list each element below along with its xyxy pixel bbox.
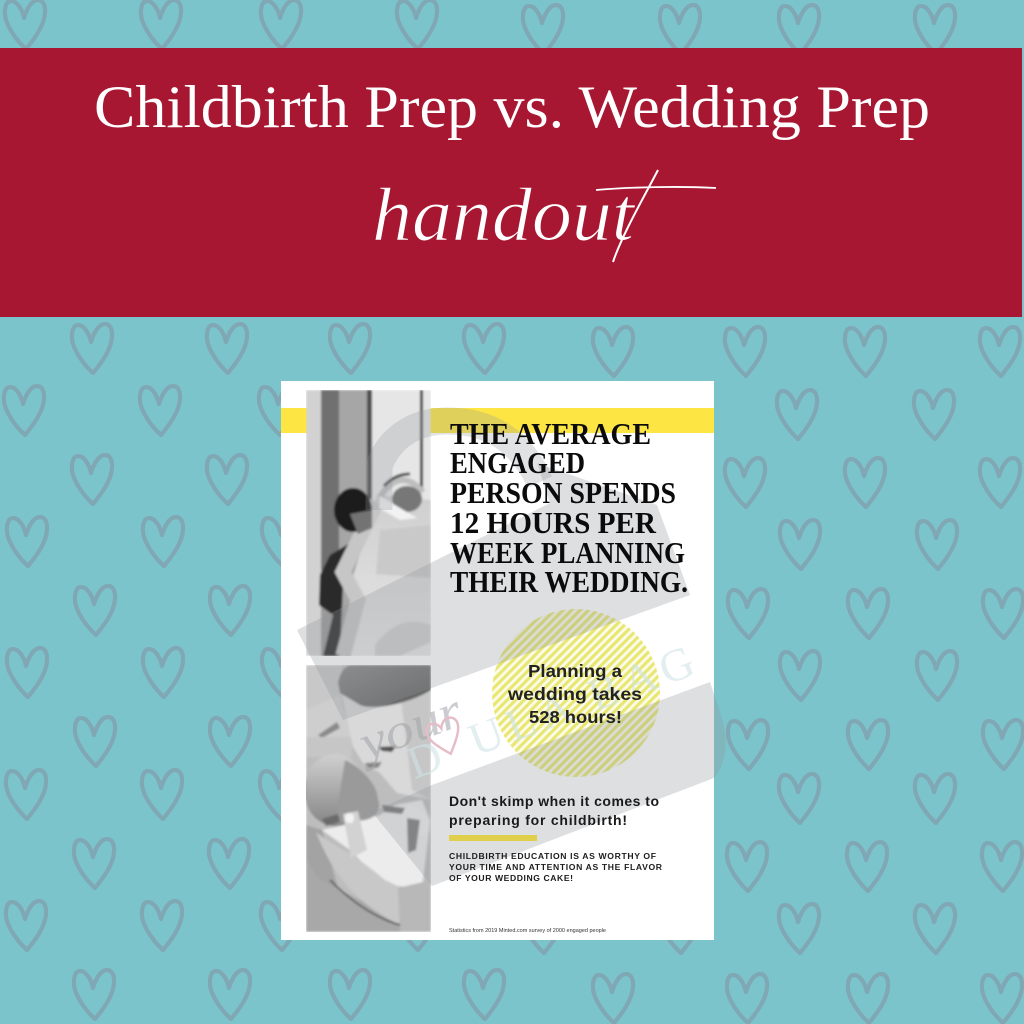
watermark logo: D [400, 729, 449, 789]
panel: title banner [0, 48, 1022, 317]
heading: THE AVERAGE [450, 416, 651, 451]
yellow rule [449, 835, 537, 841]
yellow header bar [281, 408, 714, 433]
watermark logo: your [346, 682, 470, 773]
watermark overlay [297, 421, 726, 886]
striped circle [492, 609, 660, 777]
title: Childbirth Prep vs. Wedding Prep [94, 74, 930, 140]
watermark logo: ULA BAG [462, 635, 701, 765]
circle text: 528 hours! [529, 707, 622, 727]
photo: mother and newborn [304, 665, 431, 932]
photo: bride and groom [306, 390, 431, 656]
heading: WEEK PLANNING [450, 535, 685, 570]
circle text: Planning a [528, 661, 622, 681]
callout text [449, 793, 659, 828]
circle text [507, 661, 642, 727]
body text: YOUR TIME AND ATTENTION AS THE FLAVOR [449, 862, 663, 872]
heading: PERSON SPENDS [450, 475, 676, 510]
heading: THEIR WEDDING. [450, 564, 688, 599]
panel: handout page [281, 381, 714, 940]
subtitle: handout: handout [372, 173, 636, 257]
body text [449, 851, 663, 883]
heading: 12 HOURS PER [450, 505, 657, 540]
body text: CHILDBIRTH EDUCATION IS AS WORTHY OF [449, 851, 656, 861]
subtitle: handout [372, 170, 716, 262]
heading [450, 416, 688, 599]
body text: OF YOUR WEDDING CAKE! [449, 873, 573, 883]
heading: ENGAGED [450, 445, 585, 480]
callout text: preparing for childbirth! [449, 812, 627, 828]
footnote: Statistics from 2019 Minted.com survey of 2000 engaged people [449, 928, 606, 934]
callout text: Don't skimp when it comes to [449, 793, 659, 809]
circle text: wedding takes [507, 684, 642, 704]
watermark logo [346, 599, 701, 804]
